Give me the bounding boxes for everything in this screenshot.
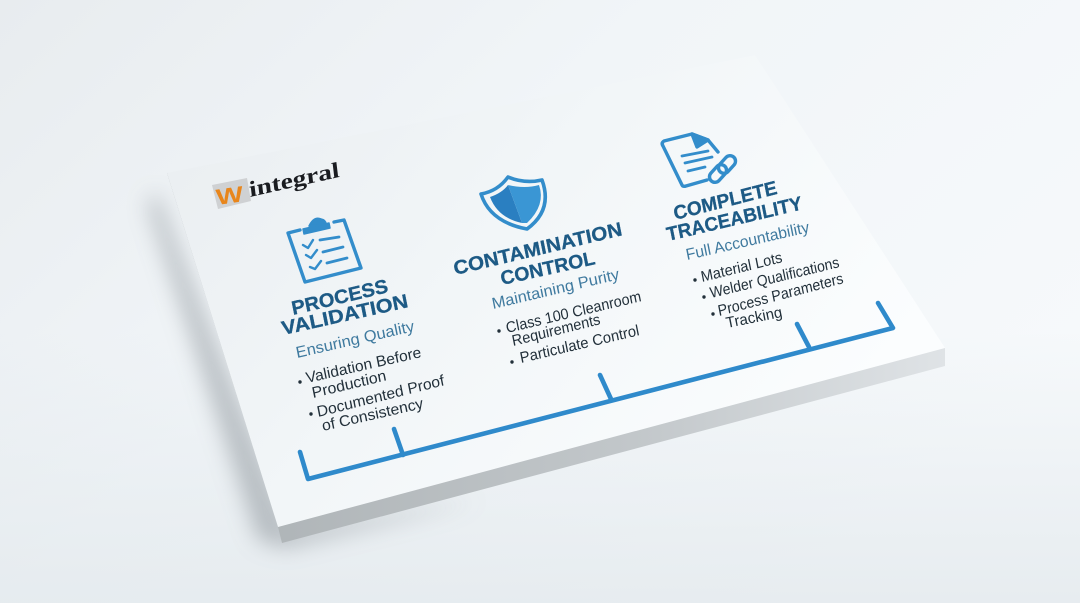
paper sheet xyxy=(167,55,945,527)
paper shadow xyxy=(148,192,480,548)
bullet list: Welder Qualifications xyxy=(708,254,841,302)
subtitle: full accountability: Full Accountability xyxy=(684,219,811,264)
paper stack edge xyxy=(167,173,945,543)
bullet list: Validation Before xyxy=(304,344,423,387)
heading: process validation: VALIDATION xyxy=(280,290,410,340)
bullet list: Particulate Control xyxy=(518,322,641,367)
icon: shield xyxy=(481,177,545,229)
icon: clipboard xyxy=(288,218,361,282)
bullet list: Material Lots xyxy=(699,249,784,286)
timeline bracket xyxy=(300,303,893,479)
column: process validation xyxy=(280,218,446,435)
bullet list: Tracking xyxy=(724,304,784,332)
heading: contamination control: CONTAMINATION xyxy=(452,218,624,280)
column: contamination control xyxy=(452,177,643,367)
bullet list: of Consistency xyxy=(320,395,425,435)
heading: process validation: PROCESS xyxy=(290,275,390,320)
heading: complete traceability: COMPLETE xyxy=(672,177,779,225)
heading: contamination control: CONTROL xyxy=(499,247,597,290)
logo wordmark: integral xyxy=(248,157,341,202)
icon: document with chain link xyxy=(662,134,738,186)
bullet list: Requirements xyxy=(510,311,602,350)
logo W: W xyxy=(215,181,245,210)
bullet list xyxy=(693,249,845,332)
bullet list xyxy=(298,344,446,435)
bullet list: Class 100 Cleanroom xyxy=(504,288,643,337)
bullet list: Documented Proof xyxy=(315,372,446,421)
bullet list xyxy=(497,288,643,367)
bullet list: Production xyxy=(310,368,388,402)
subtitle: ensuring quality: Ensuring Quality xyxy=(294,318,416,362)
logo badge xyxy=(212,178,251,209)
heading: complete traceability: TRACEABILITY xyxy=(665,193,804,246)
subtitle: maintaining purity: Maintaining Purity xyxy=(490,266,621,313)
logo xyxy=(212,157,341,210)
heading: process validation xyxy=(280,275,410,340)
column: complete traceability xyxy=(662,134,845,332)
bullet list: Process Parameters xyxy=(716,270,845,320)
